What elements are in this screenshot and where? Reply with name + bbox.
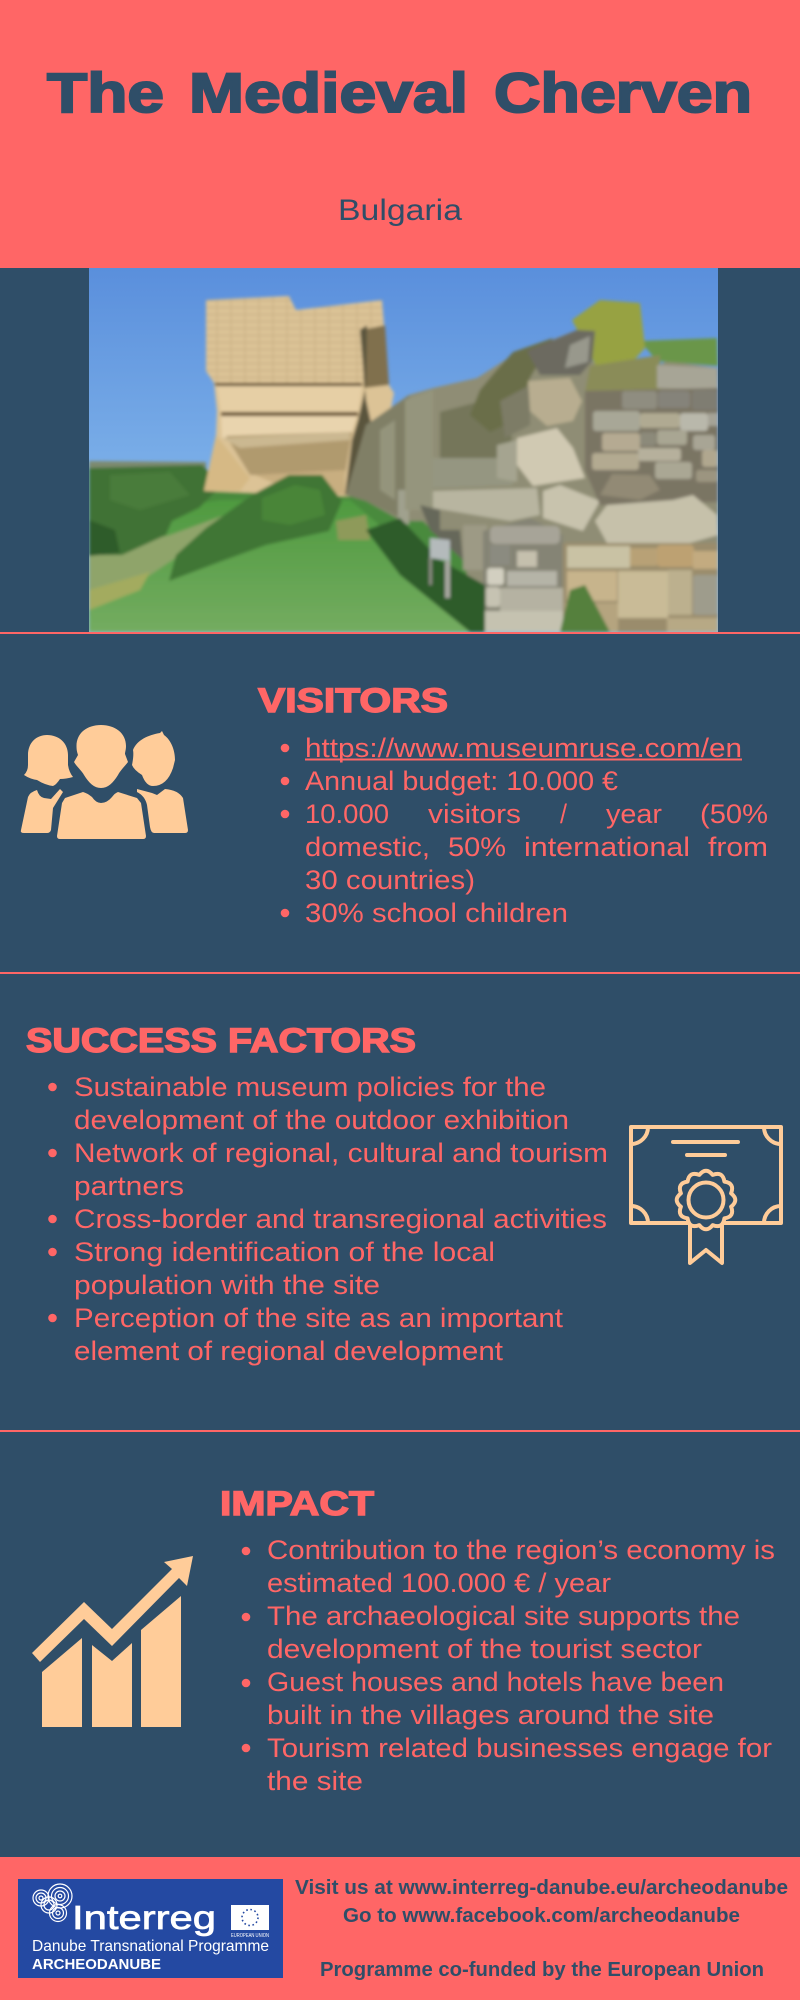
list: success factors: population with the site bbox=[74, 1270, 380, 1300]
list: impact: Contribution to the region’s economy is bbox=[267, 1535, 775, 1565]
list: impact: estimated 100.000 € / year bbox=[267, 1568, 611, 1598]
boulder bbox=[527, 330, 595, 375]
title: The bbox=[47, 61, 164, 124]
list: success factors: Perception of the site as an important bbox=[74, 1303, 564, 1333]
icon: rising bar chart with arrow bbox=[32, 1556, 193, 1727]
icon: group of people bbox=[21, 725, 188, 839]
grass bbox=[89, 500, 490, 632]
list: visitors facts: year bbox=[606, 799, 662, 829]
subtitle: country: Bulgaria bbox=[338, 194, 462, 227]
list: success factors: development of the outdoor exhibition bbox=[74, 1105, 569, 1135]
front pier bbox=[463, 525, 487, 570]
distant horizon bbox=[89, 461, 206, 470]
list: success factors: partners bbox=[74, 1171, 184, 1201]
footer contact text bbox=[295, 1877, 788, 1981]
tower bbox=[204, 296, 394, 497]
list: impact: Guest houses and hotels have been bbox=[267, 1667, 724, 1697]
list: success factors: Cross-border and transregional activities bbox=[74, 1204, 607, 1234]
divider bbox=[0, 632, 800, 634]
list: visitors facts bbox=[281, 733, 768, 928]
list: success factors bbox=[48, 1072, 608, 1366]
title: Cherven bbox=[494, 61, 752, 124]
footer contact text: Programme co-funded by the European Union bbox=[320, 1959, 764, 1981]
list: visitors facts: https://www.museumruse.com/en bbox=[305, 733, 742, 763]
list: impact: development of the tourist sector bbox=[267, 1634, 702, 1664]
icon: Interreg ripple circles bbox=[33, 1884, 72, 1922]
list: success factors: Strong identification of the local bbox=[74, 1237, 495, 1267]
fortress wall base bbox=[374, 336, 718, 585]
header panel bbox=[0, 0, 800, 268]
panel: visitors bbox=[21, 682, 768, 928]
photo: medieval tower and fortress wall bbox=[89, 268, 718, 632]
list: impact: Tourism related businesses engage for bbox=[267, 1733, 772, 1763]
list: visitors facts: (50% bbox=[700, 799, 768, 829]
list: visitors facts: 30% school children bbox=[305, 898, 568, 928]
list: success factors: Sustainable museum policies for the bbox=[74, 1072, 546, 1102]
heading: impact: IMPACT bbox=[220, 1485, 374, 1523]
divider bbox=[0, 972, 800, 974]
list: visitors facts: 10.000 bbox=[305, 799, 389, 829]
vegetation over wall bbox=[470, 338, 553, 432]
list: impact: the site bbox=[267, 1766, 363, 1796]
list: impact: built in the villages around the site bbox=[267, 1700, 714, 1730]
icon: EU flag: EUROPEAN UNION bbox=[231, 1933, 269, 1939]
logo: Interreg Danube Transnational Programme: ARCHEODANUBE bbox=[32, 1956, 161, 1973]
list: visitors facts: visitors bbox=[428, 799, 521, 829]
heading: visitors: VISITORS bbox=[258, 682, 448, 720]
logo: Interreg Danube Transnational Programme: Danube Transnational Programme bbox=[32, 1938, 269, 1955]
footer contact text: Go to www.facebook.com/archeodanube bbox=[343, 1905, 740, 1927]
footer contact text: Visit us at www.interreg-danube.eu/archeodanube bbox=[295, 1877, 788, 1899]
logo: Interreg Danube Transnational Programme bbox=[18, 1879, 283, 1978]
left bushes bbox=[89, 465, 222, 555]
list: visitors facts: Annual budget: 10.000 € bbox=[305, 766, 618, 796]
title: Medieval bbox=[189, 61, 468, 124]
ground filler behind wall foot bbox=[204, 489, 469, 576]
list: impact bbox=[242, 1535, 775, 1796]
coursed stones, right bbox=[585, 388, 718, 505]
footer panel bbox=[0, 1857, 800, 2000]
wall shadow on grass bbox=[366, 518, 485, 632]
list: success factors: Network of regional, cultural and tourism bbox=[74, 1138, 608, 1168]
central bush bbox=[169, 475, 342, 581]
heading: success factors: SUCCESS FACTORS bbox=[26, 1022, 416, 1060]
title bbox=[47, 61, 752, 124]
list: visitors facts: international bbox=[524, 832, 690, 862]
list: impact: The archaeological site supports the bbox=[267, 1601, 740, 1631]
panel: impact bbox=[32, 1485, 775, 1796]
list: visitors facts: 30 countries) bbox=[305, 865, 475, 895]
information sign bbox=[430, 538, 450, 561]
list: success factors: element of regional development bbox=[74, 1336, 504, 1366]
list: visitors facts: domestic, bbox=[305, 832, 430, 862]
list: visitors facts: / bbox=[560, 799, 567, 829]
panel: success factors bbox=[26, 1022, 781, 1366]
list: visitors facts: 50% bbox=[448, 832, 506, 862]
dressed blocks, lower right bbox=[563, 543, 718, 632]
icon: EU flag bbox=[231, 1905, 269, 1939]
icon: certificate with seal bbox=[631, 1127, 781, 1263]
divider bbox=[0, 1430, 800, 1432]
logo: Interreg Danube Transnational Programme: Interreg bbox=[72, 1899, 216, 1936]
list: visitors facts: from bbox=[708, 832, 768, 862]
large stones bbox=[500, 385, 530, 438]
small bush at wall foot bbox=[560, 585, 610, 632]
